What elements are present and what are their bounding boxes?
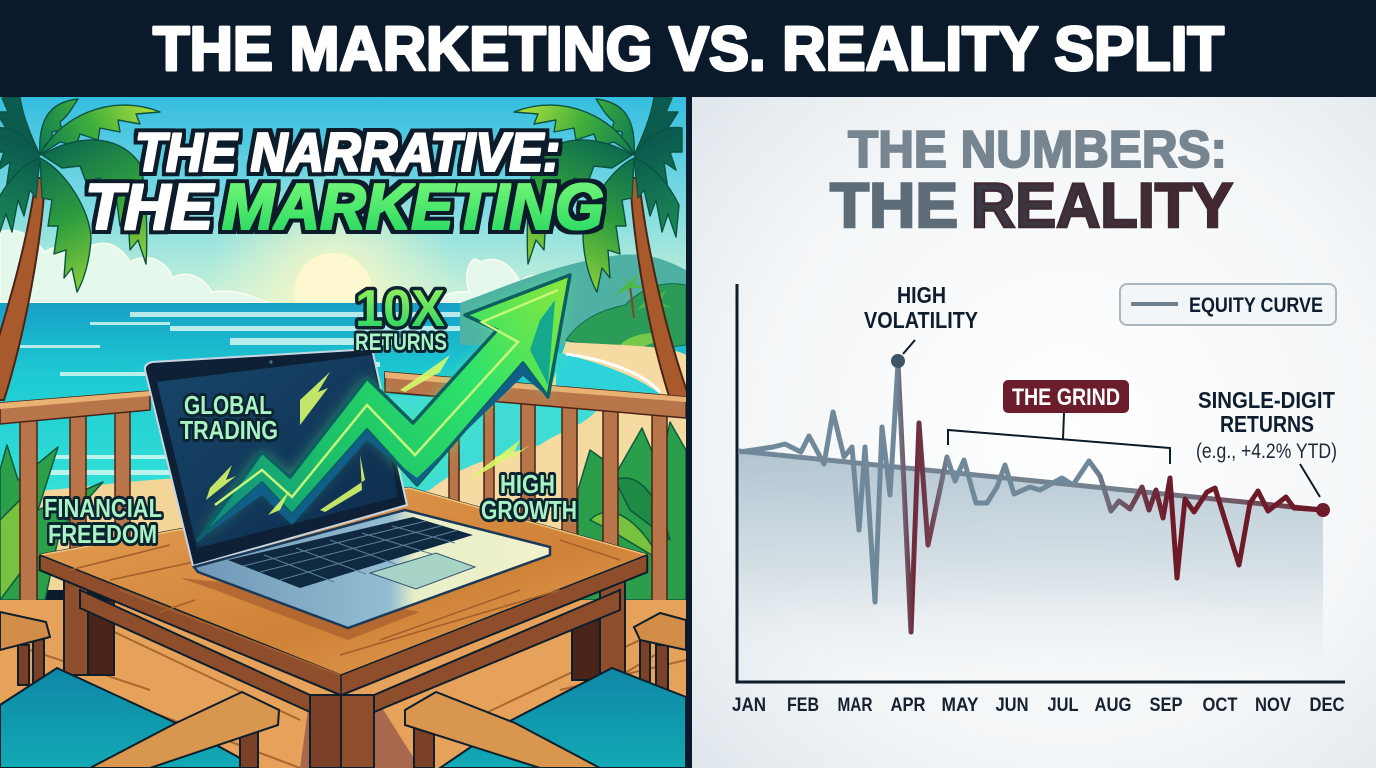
sun bbox=[208, 160, 458, 410]
month labels bbox=[732, 695, 1345, 716]
right panel: the numbers bbox=[692, 97, 1376, 768]
railing bbox=[0, 372, 686, 608]
heading: the numbers, the reality bbox=[830, 121, 1233, 241]
distant hills bbox=[460, 254, 686, 345]
heading: the numbers, the reality: THE NUMBERS: bbox=[848, 121, 1227, 179]
label: global trading bbox=[180, 390, 278, 445]
callout: the grind with bracket bbox=[948, 380, 1170, 464]
table top bbox=[40, 488, 647, 695]
heading: the numbers, the reality: THE bbox=[830, 171, 958, 241]
month labels: NOV bbox=[1255, 695, 1291, 716]
trend line bbox=[738, 451, 1323, 510]
heading: the narrative, the marketing: THE NARRATIVE: bbox=[135, 121, 560, 183]
callout: single-digit returns: (e.g., +4.2% YTD) bbox=[1196, 440, 1337, 463]
label: financial freedom: FREEDOM bbox=[48, 519, 157, 549]
foliage behind railing bbox=[0, 422, 686, 600]
callout: single-digit returns: RETURNS bbox=[1220, 411, 1314, 437]
clouds bbox=[0, 230, 600, 303]
callout: high volatility bbox=[864, 282, 978, 368]
month labels: OCT bbox=[1202, 695, 1238, 716]
legend: equity curve: EQUITY CURVE bbox=[1189, 294, 1323, 317]
keyboard bbox=[228, 517, 473, 588]
palm tree left bbox=[0, 97, 160, 400]
equity curve chart bbox=[732, 282, 1345, 716]
palm tree right bbox=[514, 97, 690, 405]
callout: the grind with bracket: THE GRIND bbox=[1012, 384, 1120, 411]
title banner: THE MARKETING VS. REALITY SPLIT bbox=[153, 15, 1224, 84]
axes bbox=[737, 284, 1345, 682]
title banner bbox=[0, 0, 1376, 97]
chair left bbox=[0, 668, 279, 768]
heading: the narrative, the marketing: THE bbox=[85, 170, 215, 243]
month labels: APR bbox=[890, 695, 926, 716]
month labels: AUG bbox=[1094, 695, 1132, 716]
label: high growth: HIGH bbox=[500, 469, 555, 499]
month labels: FEB bbox=[787, 695, 819, 716]
month labels: JUL bbox=[1048, 695, 1079, 716]
lightning accents bbox=[206, 355, 530, 515]
small chair right bbox=[634, 613, 686, 690]
heading: the numbers, the reality: REALITY bbox=[971, 171, 1233, 241]
laptop base bbox=[194, 510, 550, 628]
shaded area bbox=[738, 451, 1323, 672]
label: high growth bbox=[481, 469, 577, 525]
callout: single-digit returns: SINGLE-DIGIT bbox=[1198, 387, 1335, 413]
table legs bbox=[64, 575, 625, 768]
label: 10x returns: 10X bbox=[355, 280, 445, 338]
deck floor bbox=[0, 600, 686, 768]
center divider bbox=[686, 97, 692, 768]
callout: single-digit returns bbox=[1196, 387, 1337, 517]
label: global trading: TRADING bbox=[180, 415, 278, 445]
label: financial freedom bbox=[44, 493, 162, 549]
heading: the narrative, the marketing: MARKETING bbox=[222, 170, 604, 243]
month labels: MAR bbox=[838, 695, 873, 716]
left panel: the marketing illustration bbox=[0, 97, 690, 768]
chair right bbox=[405, 668, 686, 768]
volatile equity line bbox=[740, 363, 1323, 632]
left beach bbox=[0, 478, 200, 590]
legend: equity curve bbox=[1120, 284, 1336, 325]
callout: high volatility: HIGH bbox=[897, 282, 946, 308]
small chair left bbox=[0, 612, 50, 685]
sea bbox=[0, 303, 686, 503]
label: global trading: GLOBAL bbox=[184, 390, 272, 420]
label: high growth: GROWTH bbox=[481, 495, 577, 525]
island with small palms bbox=[566, 272, 686, 348]
heading: the narrative, the marketing bbox=[85, 121, 604, 243]
laptop bbox=[145, 349, 550, 628]
laptop screen bbox=[145, 349, 407, 566]
trackpad bbox=[370, 553, 475, 589]
month labels: SEP bbox=[1150, 695, 1183, 716]
beach and bay bbox=[390, 342, 686, 600]
callout: high volatility: VOLATILITY bbox=[864, 307, 978, 333]
label: 10x returns: RETURNS bbox=[355, 329, 447, 356]
label: financial freedom: FINANCIAL bbox=[44, 493, 162, 523]
month labels: DEC bbox=[1310, 695, 1345, 716]
month labels: MAY bbox=[942, 695, 979, 716]
wooden table bbox=[40, 488, 647, 768]
month labels: JAN bbox=[732, 695, 766, 716]
green rising arrow bbox=[198, 275, 570, 540]
month labels: JUN bbox=[996, 695, 1028, 716]
